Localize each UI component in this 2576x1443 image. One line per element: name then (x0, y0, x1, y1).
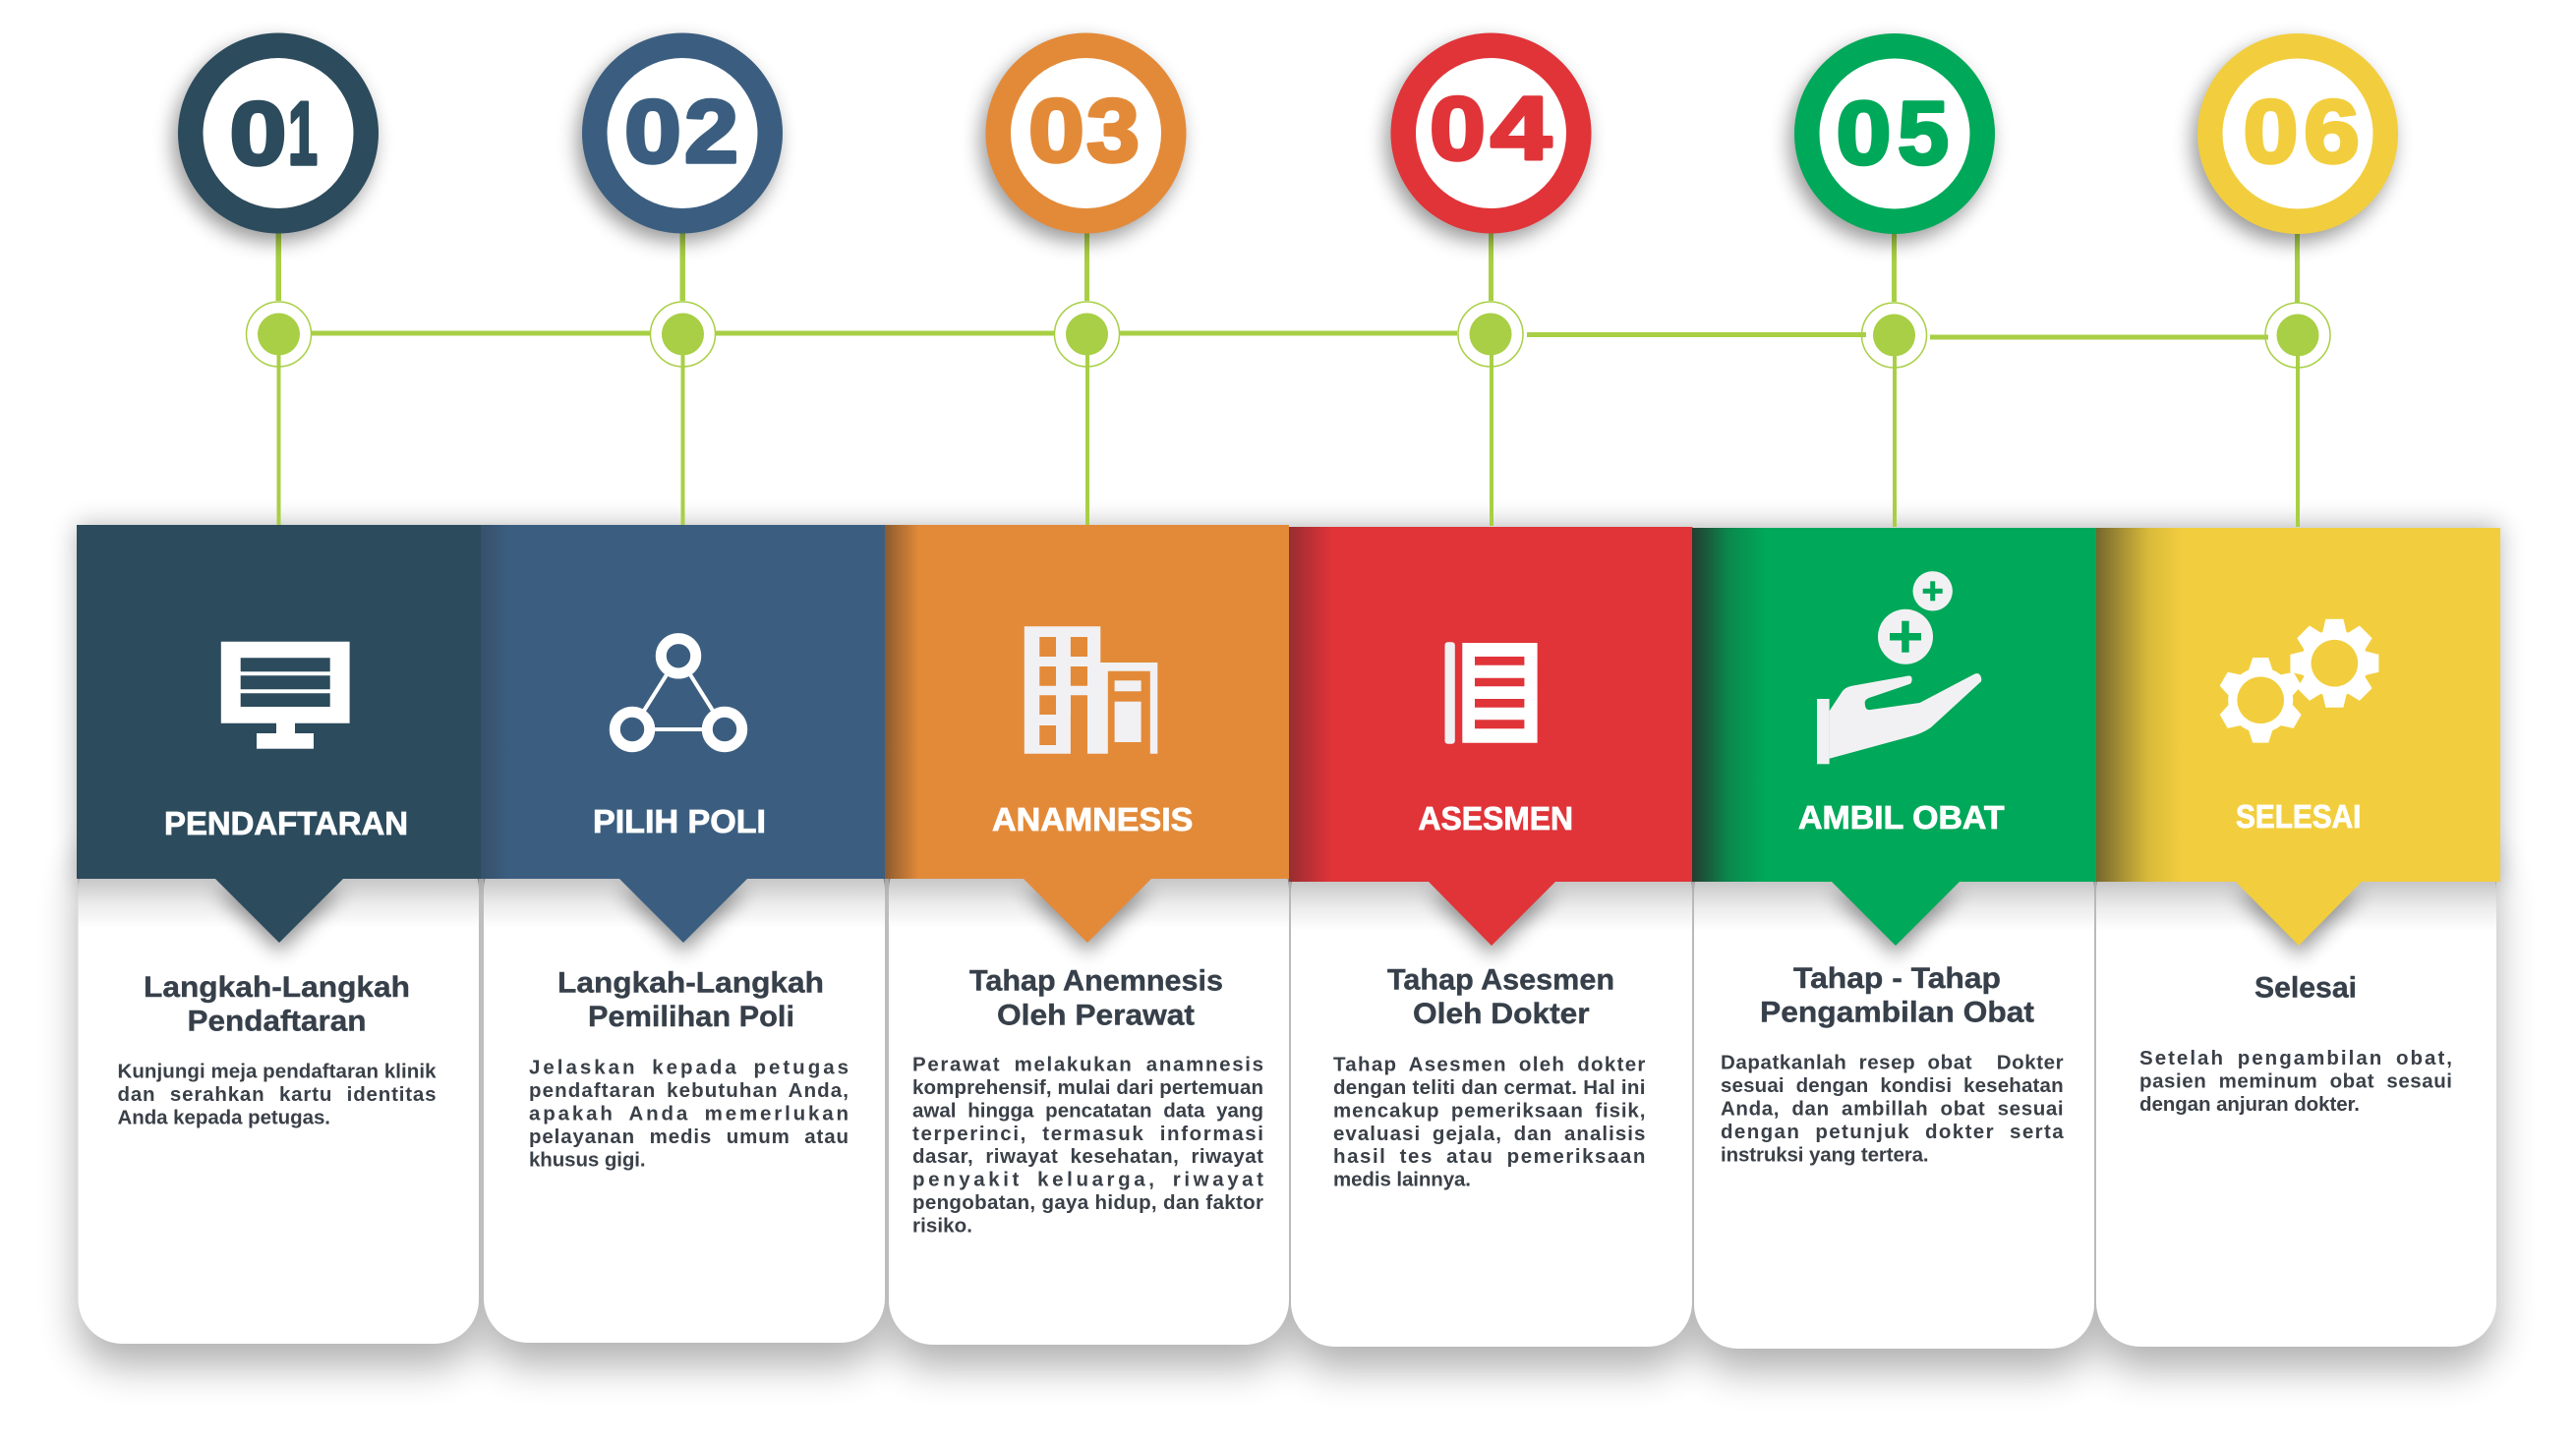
text: step 4 description: medis lainnya. (1333, 1169, 1471, 1191)
panel: step 2 card (481, 525, 885, 1343)
header: step 2 banner (481, 525, 885, 943)
panel: step 1 card (77, 525, 481, 1344)
heading: step 2 title (557, 966, 824, 1033)
heading: step 5 title: Pengambilan Obat (1760, 997, 2034, 1028)
text: step 3 description: awal hingga pencatatan data yang (912, 1099, 1263, 1122)
icon: building (1025, 626, 1157, 754)
icon: computer monitor (221, 642, 350, 749)
number badge 05: 5 (1898, 85, 1949, 183)
heading: step 2 title: Pemilihan Poli (588, 1001, 794, 1033)
text: step 2 description: pendaftaran kebutuhan Anda, (529, 1079, 849, 1102)
number badge 05: 0 (1837, 85, 1892, 183)
text: step 3 description: komprehensif, mulai dari pertemuan (912, 1076, 1263, 1099)
panel: step 3 card (885, 525, 1289, 1345)
timeline node 2 (651, 302, 716, 367)
text: step 5 description (1721, 1052, 2064, 1166)
heading: step 4 title: Oleh Dokter (1413, 998, 1590, 1030)
timeline node 1 (246, 302, 311, 367)
label: PILIH POLI: PILIH POLI (593, 803, 766, 839)
text: step 3 description (912, 1054, 1263, 1237)
text: step 2 description: apakah Anda memerlukan (529, 1102, 849, 1125)
header: step 6 banner (2096, 528, 2500, 946)
text: step 1 description: Kunjungi meja pendaftaran klinik (118, 1061, 437, 1083)
text: step 6 description (2139, 1047, 2452, 1116)
heading: step 2 title: Langkah-Langkah (557, 966, 824, 999)
heading: step 3 title (969, 965, 1223, 1031)
icon: document list (1445, 642, 1538, 744)
connector: vertical stems (275, 233, 2300, 527)
heading: step 5 title: Tahap - Tahap (1793, 962, 2001, 995)
number badge 06: 6 (2304, 83, 2360, 182)
header: step 5 banner (1692, 528, 2096, 946)
heading: step 1 title: Pendaftaran (187, 1005, 366, 1038)
heading: step 6 title: Selesai (2254, 971, 2357, 1005)
header: step 3 banner (885, 525, 1289, 943)
text: step 5 description: dengan petunjuk dokter serta (1721, 1121, 2064, 1143)
text: step 4 description: evaluasi gejala, dan analisis (1333, 1123, 1645, 1145)
number badge 03: 3 (1086, 82, 1140, 181)
text: step 3 description: pengobatan, gaya hidup, dan faktor (912, 1191, 1263, 1214)
number badge 06 (2193, 33, 2398, 243)
text: step 3 description: Perawat melakukan anamnesis (912, 1054, 1263, 1075)
text: step 4 description: hasil tes atau pemeriksaan (1333, 1145, 1645, 1168)
text: step 4 description (1333, 1054, 1645, 1191)
text: step 3 description: terperinci, termasuk informasi (912, 1123, 1263, 1145)
text: step 3 description: risiko. (912, 1214, 972, 1237)
text: step 5 description: Anda, dan ambillah obat sesuai (1721, 1097, 2064, 1121)
icon: hand with medicine (1817, 571, 1981, 764)
text: step 2 description: pelayanan medis umum atau (529, 1126, 849, 1148)
number badge 02: 0 (624, 83, 681, 182)
icon: network triangle (615, 639, 742, 747)
number badge 06: 0 (2244, 83, 2299, 182)
text: step 2 description: khusus gigi. (529, 1148, 646, 1171)
text: step 5 description: Dapatkanlah resep obat Dokter (1721, 1052, 2064, 1074)
text: step 4 description: mencakup pemeriksaan fisik, (1333, 1099, 1645, 1122)
label: AMBIL OBAT: AMBIL OBAT (1798, 799, 2005, 836)
number badge 04 (1386, 33, 1591, 242)
label: SELESAI: SELESAI (2236, 798, 2361, 835)
timeline node 4 (1458, 302, 1523, 367)
number badge 04: 4 (1491, 80, 1551, 179)
panel: step 5 card (1692, 528, 2096, 1349)
timeline node 3 (1054, 302, 1119, 367)
heading: step 1 title (144, 971, 410, 1038)
text: step 1 description: Anda kepada petugas. (118, 1107, 330, 1128)
text: step 4 description: Tahap Asesmen oleh dokter (1333, 1054, 1645, 1075)
heading: step 3 title: Tahap Anemnesis (969, 965, 1223, 998)
number badge 05 (1789, 33, 1995, 243)
text: step 4 description: dengan teliti dan cermat. Hal ini (1333, 1076, 1645, 1099)
heading: step 5 title (1760, 962, 2034, 1028)
text: step 2 description: Jelaskan kepada petugas (529, 1056, 849, 1078)
panel: step 4 card (1289, 527, 1693, 1347)
heading: step 4 title (1387, 963, 1614, 1030)
text: step 1 description: dan serahkan kartu identitas (118, 1083, 437, 1106)
text: step 1 description (118, 1061, 437, 1128)
header: step 1 banner (77, 525, 481, 943)
heading: step 3 title: Oleh Perawat (997, 999, 1195, 1031)
label: ANAMNESIS: ANAMNESIS (992, 801, 1193, 837)
text: step 5 description: instruksi yang tertera. (1721, 1143, 1929, 1166)
number badge 01: 0 (230, 85, 287, 184)
number badge 04: 0 (1430, 80, 1486, 179)
number badge 03: 0 (1028, 82, 1084, 181)
number badge 02: 2 (684, 83, 738, 182)
icon: gears (2217, 619, 2378, 743)
text: step 6 description: pasien meminum obat sesaui (2139, 1069, 2452, 1092)
text: step 5 description: sesuai dengan kondisi kesehatan (1721, 1074, 2064, 1097)
text: step 2 description (529, 1056, 849, 1171)
text: step 6 description: Setelah pengambilan obat, (2139, 1047, 2452, 1069)
number badge 02 (577, 33, 783, 242)
number badge 03 (981, 33, 1186, 242)
background shadows of cards and header band (77, 525, 2500, 1371)
label: ASESMEN: ASESMEN (1418, 800, 1573, 837)
timeline node 6 (2265, 303, 2330, 368)
text: step 3 description: dasar, riwayat kesehatan, riwayat (912, 1145, 1263, 1168)
heading: step 1 title: Langkah-Langkah (144, 971, 410, 1004)
heading: step 4 title: Tahap Asesmen (1387, 963, 1614, 997)
panel: step 6 card (2096, 528, 2500, 1347)
header: step 4 banner (1289, 527, 1693, 946)
text: step 3 description: penyakit keluarga, riwayat (912, 1169, 1263, 1191)
connector: horizontal timeline (312, 330, 2268, 340)
number badge 01 (173, 33, 379, 242)
label: PENDAFTARAN: PENDAFTARAN (164, 805, 408, 841)
text: step 6 description: dengan anjuran dokter. (2139, 1093, 2360, 1116)
number badge 01: 1 (288, 85, 318, 184)
timeline node 5 (1862, 303, 1927, 368)
